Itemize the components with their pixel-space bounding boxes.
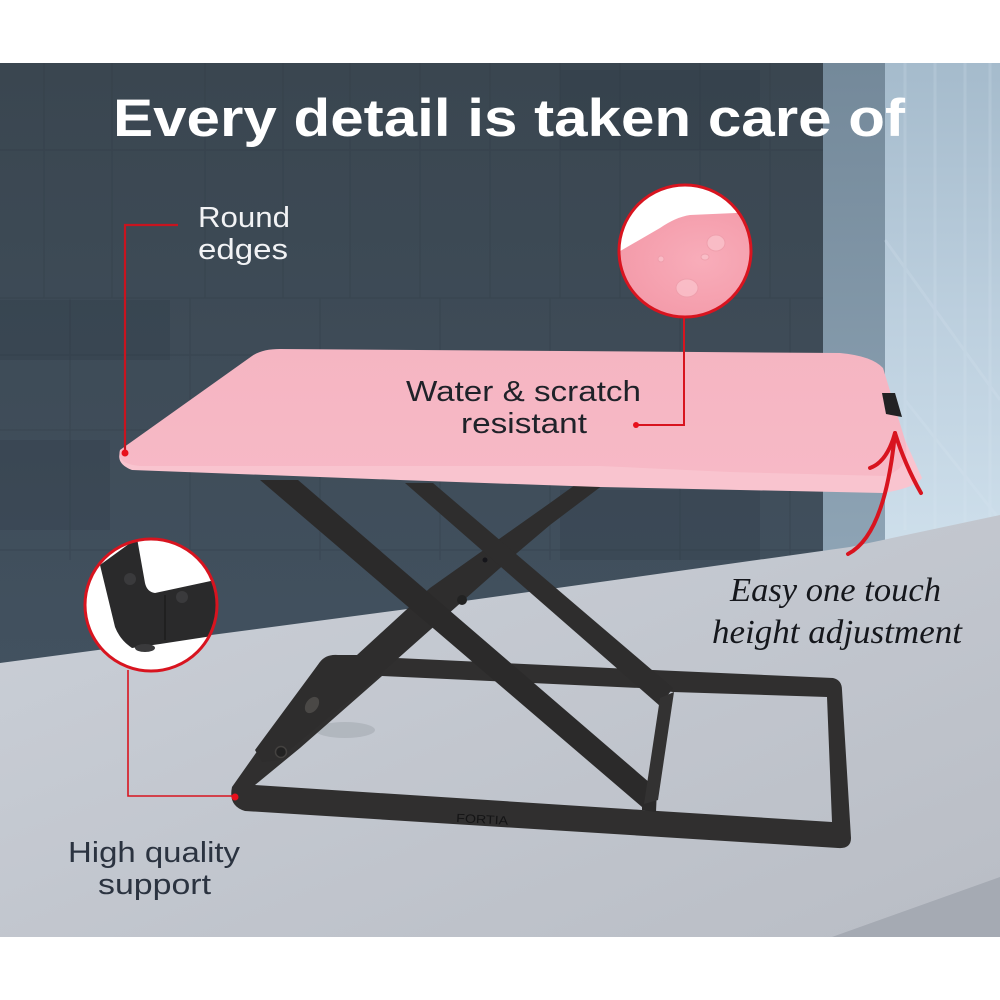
product: standing desk riser frame <box>231 480 851 848</box>
callout: round edges: Round <box>198 202 290 234</box>
callout: round edges: edges <box>198 234 288 266</box>
callout: water and scratch resistant <box>406 180 760 440</box>
arrow: curved red arrow to button <box>848 433 921 554</box>
title: Every detail is taken care of <box>113 89 905 148</box>
logo on frame: FORTIA <box>456 811 509 828</box>
callout: high quality support: support <box>98 869 211 901</box>
callout: water and scratch resistant: resistant <box>461 408 587 440</box>
detail circle: frame corner <box>86 540 216 670</box>
callout: easy one touch height adjustment <box>712 433 964 651</box>
desktop surface <box>119 349 922 493</box>
height adjustment button <box>882 393 902 417</box>
callout: easy one touch height adjustment: Easy one touch <box>729 572 941 609</box>
cross arm with hinge mechanism <box>255 485 603 762</box>
base frame <box>231 655 851 848</box>
callout: easy one touch height adjustment: height adjustment <box>712 614 964 651</box>
callout: round edges <box>122 202 290 456</box>
detail circle: water droplets <box>620 186 750 316</box>
callout: high quality support: High quality <box>68 837 241 869</box>
callout: water and scratch resistant: Water & scratch <box>406 376 641 408</box>
callout: high quality support <box>68 535 241 901</box>
scissor legs <box>255 480 674 812</box>
